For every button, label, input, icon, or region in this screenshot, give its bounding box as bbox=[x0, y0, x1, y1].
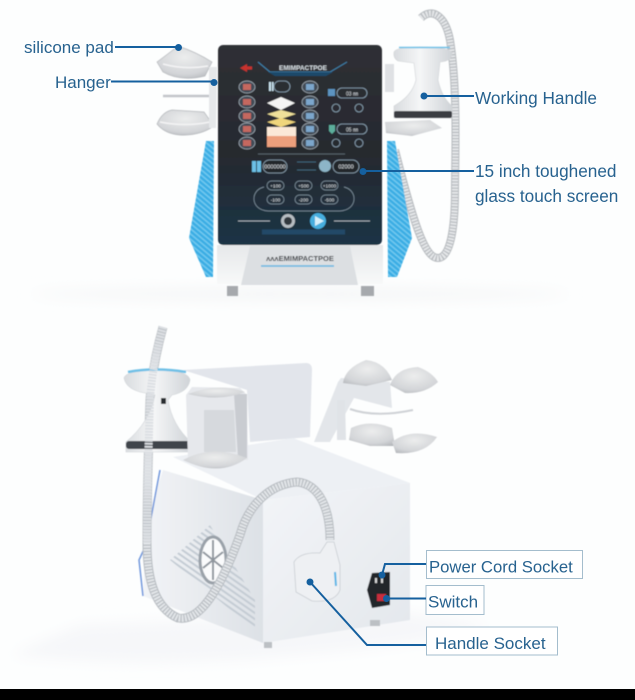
working handle on left bbox=[124, 370, 191, 452]
callout: working handle bbox=[420, 88, 597, 108]
bottom black bar bbox=[0, 689, 635, 700]
callout: switch bbox=[383, 586, 484, 614]
handle in socket bbox=[294, 542, 340, 601]
bottom floor shadow bbox=[10, 612, 490, 662]
feet bbox=[264, 642, 272, 648]
touch screen: +1000 bbox=[323, 184, 337, 190]
hanger with pads on left bbox=[183, 387, 248, 469]
right pads behind handle bbox=[385, 120, 442, 136]
callout: power cord socket bbox=[378, 550, 582, 578]
touch screen: EMIMPACTPOE bbox=[279, 65, 328, 72]
callout: hanger: Hanger bbox=[55, 73, 111, 92]
working handle bbox=[394, 47, 452, 118]
separator bbox=[258, 153, 345, 155]
counters: 02000 bbox=[338, 164, 354, 170]
body icons bbox=[239, 81, 318, 149]
touch screen: -100 bbox=[271, 198, 281, 204]
callout: handle socket bbox=[306, 578, 558, 655]
silicone pads on hanger bbox=[157, 46, 217, 135]
base logo: ᴧᴧᴧEMIMPACTPOE bbox=[266, 254, 334, 263]
base bbox=[217, 245, 383, 284]
upper hose in front of handle bbox=[147, 327, 163, 543]
callout: hanger bbox=[55, 73, 218, 92]
pad hanger on right bbox=[314, 360, 438, 453]
timers bbox=[274, 81, 367, 147]
callout: switch: Switch bbox=[428, 592, 478, 612]
touch screen: -500 bbox=[325, 198, 335, 204]
counters bbox=[252, 160, 359, 173]
callout: power cord socket: Power Cord Socket bbox=[429, 558, 573, 576]
touch screen: +100 bbox=[270, 184, 281, 190]
callout: silicone pad bbox=[24, 38, 182, 57]
touch screen: 03 ㎜ bbox=[346, 92, 358, 98]
side vents bbox=[170, 525, 255, 630]
top machine front view bbox=[157, 13, 456, 296]
lower hose bbox=[147, 327, 330, 618]
callout: working handle: Working Handle bbox=[475, 88, 597, 108]
machine front face bbox=[263, 483, 410, 643]
callout: touch screen: glass touch screen bbox=[475, 186, 618, 206]
screen back bbox=[183, 363, 312, 442]
touch screen: +500 bbox=[298, 184, 309, 190]
top floor shadow bbox=[30, 288, 570, 300]
counters: 0000000 bbox=[264, 164, 286, 170]
screen header bbox=[258, 62, 347, 72]
coiled hose bbox=[395, 13, 456, 258]
start and photo buttons bbox=[238, 220, 370, 222]
blue side edge bbox=[139, 470, 160, 596]
callout: touch screen bbox=[360, 161, 618, 206]
machine side face bbox=[143, 470, 263, 643]
machine top face bbox=[173, 438, 410, 500]
right blue panel bbox=[387, 141, 412, 277]
value buttons bbox=[254, 181, 354, 211]
power socket bbox=[367, 572, 390, 608]
rear machine view bbox=[124, 327, 438, 648]
left blue panel bbox=[189, 141, 214, 277]
touch screen bbox=[218, 45, 382, 245]
fat layer diagram bbox=[267, 97, 295, 110]
feet bbox=[227, 286, 238, 296]
touch screen: 05 ㎜ bbox=[346, 128, 358, 134]
callout: touch screen: 15 inch toughened bbox=[475, 161, 616, 181]
fan bbox=[200, 537, 226, 583]
touch screen: -200 bbox=[299, 198, 309, 204]
callout: silicone pad: silicone pad bbox=[24, 38, 114, 57]
callout: handle socket: Handle Socket bbox=[435, 634, 546, 653]
